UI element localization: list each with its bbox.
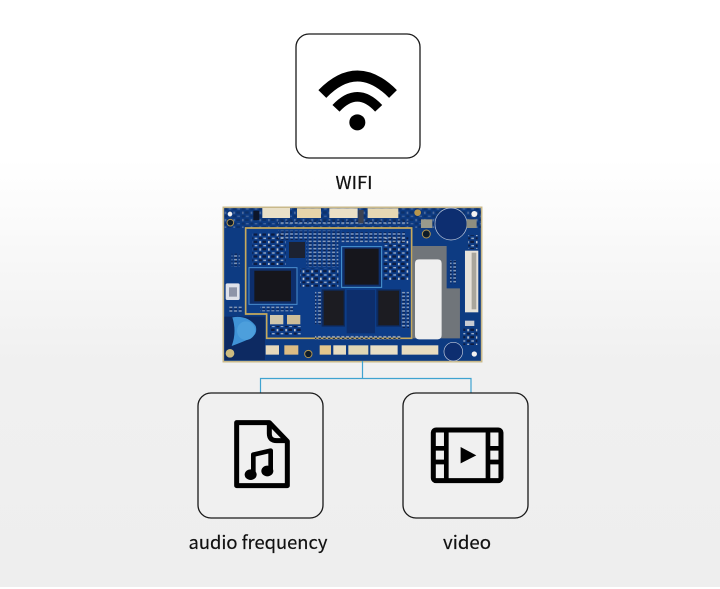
icon: wifi	[322, 76, 393, 130]
white side connector	[226, 283, 240, 300]
left memory	[249, 268, 297, 304]
dark blue corner around capacitor	[224, 317, 265, 360]
blue capacitor	[232, 317, 256, 346]
small chip	[289, 242, 305, 258]
component clusters	[252, 233, 286, 265]
circuit board photo	[223, 207, 482, 362]
panel: video card	[403, 393, 528, 518]
panel: audio frequency card	[198, 393, 323, 518]
RAM chips	[322, 289, 345, 327]
connector lines	[260, 361, 471, 393]
label: audio frequency: audio frequency	[188, 529, 328, 555]
panel: WIFI card	[296, 34, 420, 158]
top traces	[278, 221, 408, 224]
main chip	[342, 247, 382, 287]
icon: film strip	[433, 430, 501, 481]
label: video: video	[443, 529, 491, 555]
bottom connectors	[266, 345, 279, 355]
antenna area	[435, 208, 467, 240]
label: WIFI: WIFI	[336, 170, 372, 195]
shield can	[412, 246, 460, 338]
ribbon connector	[465, 251, 478, 312]
top connectors	[262, 208, 290, 218]
board base	[223, 207, 482, 362]
icon: music file	[237, 423, 287, 486]
lower right parts	[444, 342, 463, 361]
